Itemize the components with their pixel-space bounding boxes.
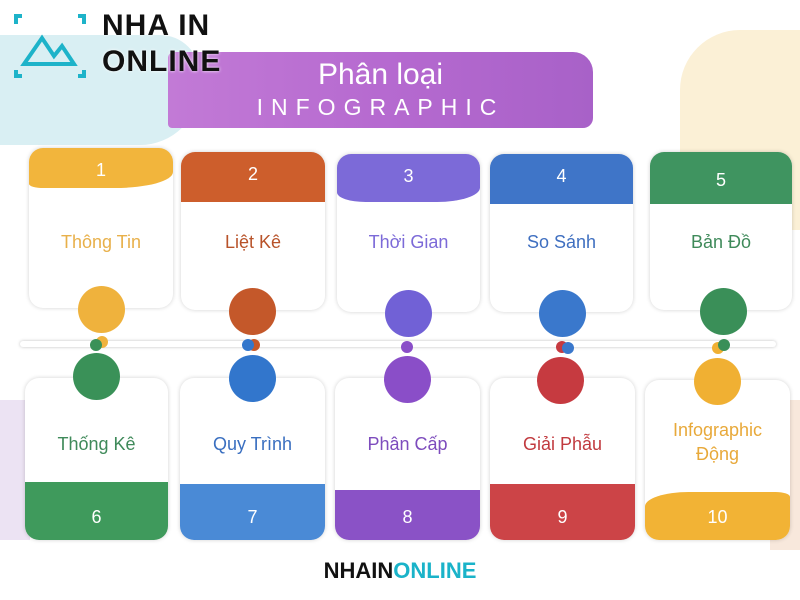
card 1: 1 xyxy=(96,160,106,180)
card 8: Phân Cấp xyxy=(367,434,448,454)
logo xyxy=(14,9,222,78)
card 8: 8 xyxy=(402,507,412,527)
card 6: Thống Kê xyxy=(57,434,136,454)
card 10: Infographic xyxy=(673,420,762,440)
card 8 xyxy=(335,378,480,540)
card 9: 9 xyxy=(557,507,568,527)
title banner xyxy=(168,52,593,128)
card 9 xyxy=(490,378,635,540)
card 5: Bản Đồ xyxy=(691,232,751,252)
logo text xyxy=(102,9,222,78)
card 4: So Sánh xyxy=(527,232,596,252)
card 5 xyxy=(650,152,792,310)
card 5: 5 xyxy=(716,170,726,190)
card 1 xyxy=(29,148,173,308)
circles xyxy=(73,286,747,405)
logo text: NHA IN xyxy=(102,9,210,42)
title banner: INFOGRAPHIC xyxy=(257,94,504,120)
logo text: ONLINE xyxy=(102,45,221,78)
card 9: Giải Phẫu xyxy=(523,434,602,454)
card 4: 4 xyxy=(556,166,566,186)
card 2 xyxy=(181,152,325,310)
card 3 xyxy=(337,154,480,312)
card 3: Thời Gian xyxy=(369,232,448,252)
card 6 xyxy=(25,378,168,540)
card 7: Quy Trình xyxy=(213,434,292,454)
footer brand: NHAINONLINE xyxy=(324,558,476,583)
card 7: 7 xyxy=(247,507,258,527)
icon: mountain frame xyxy=(14,14,86,78)
card 10: Động xyxy=(696,444,739,464)
card 3: 3 xyxy=(403,166,414,186)
card 2: Liệt Kê xyxy=(225,232,281,252)
card 6: 6 xyxy=(91,507,102,527)
timeline line xyxy=(20,341,776,347)
card 7 xyxy=(180,378,325,540)
card 2: 2 xyxy=(248,164,258,184)
card 4 xyxy=(490,154,633,312)
card 10 xyxy=(645,380,790,540)
title banner: Phân loại xyxy=(318,58,443,91)
card 10: 10 xyxy=(707,507,728,527)
card 1: Thông Tin xyxy=(61,232,141,252)
